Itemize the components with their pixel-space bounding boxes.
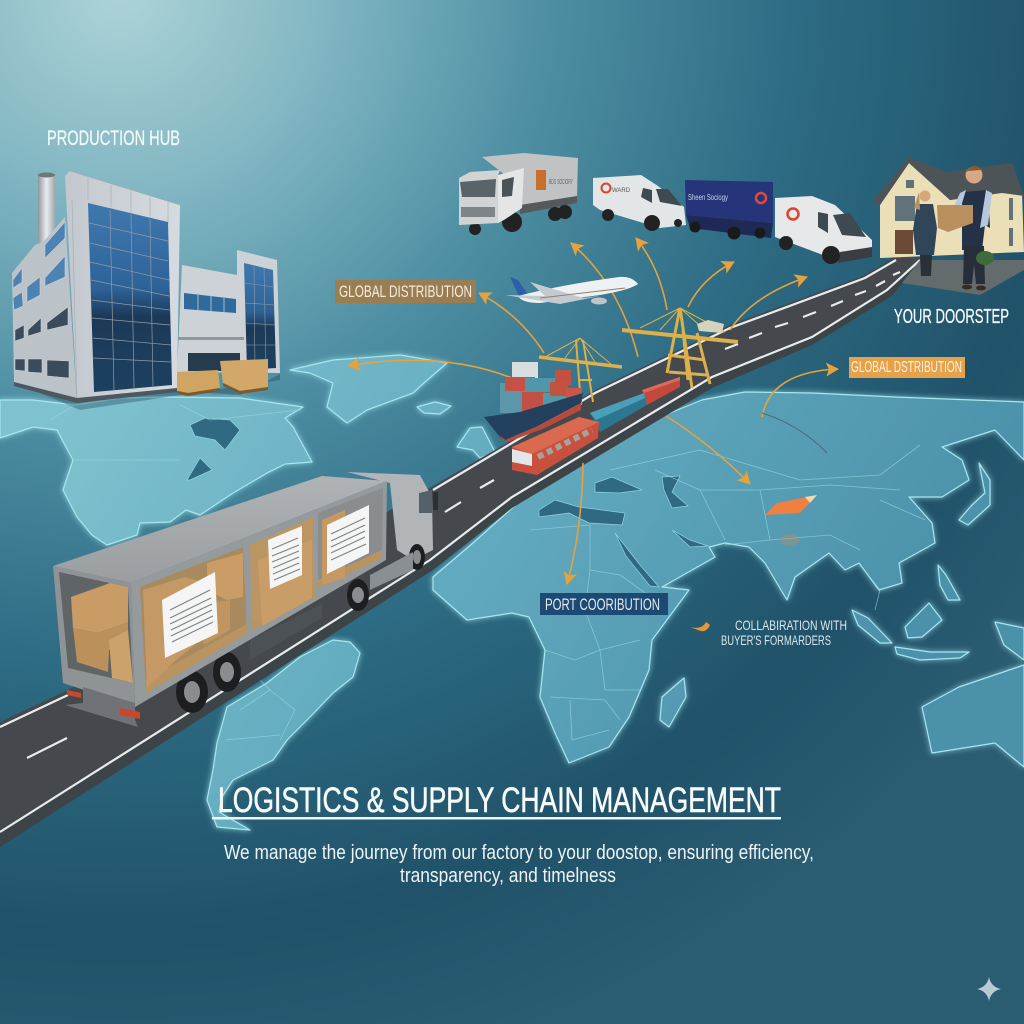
truck: rear boxes [71, 583, 133, 683]
blue truck: cargo box [685, 180, 773, 223]
arrow: down to port coordination [567, 463, 583, 584]
sea: hudson bay [190, 418, 240, 450]
van two [775, 196, 872, 264]
train: blue wagon [590, 393, 647, 432]
truck: side boxes [143, 510, 345, 687]
factory: window band [184, 293, 236, 313]
factory: right wing [177, 250, 280, 373]
map: iceland [417, 402, 451, 414]
map: eurasia and africa [433, 392, 1024, 763]
world map [0, 355, 1024, 830]
truck: grille [461, 207, 495, 217]
factory: glass curtain wall [88, 203, 172, 392]
sea: persian gulf [672, 530, 708, 547]
parcel [937, 205, 973, 232]
truck: wheels [469, 205, 572, 235]
road: surface [0, 258, 920, 832]
truck: compartment one [140, 547, 247, 693]
label: collaboration with buyer's forwarders [721, 617, 847, 648]
truck: document one [162, 572, 218, 658]
truck: document two [268, 526, 302, 589]
arrow: to greenland [348, 360, 512, 378]
ship: containers [500, 370, 582, 416]
van: bumper [838, 247, 872, 263]
label: global distribution right [849, 357, 965, 378]
factory: chimney [38, 172, 55, 247]
truck: tractor cab [347, 472, 438, 560]
shrubs [976, 251, 994, 265]
house and delivery scene [872, 157, 1024, 295]
van: logo text: WARD [612, 188, 631, 194]
ship: bridge [512, 362, 538, 380]
crane left [539, 338, 622, 405]
crane right [622, 308, 738, 388]
truck: side window [502, 177, 514, 197]
arrow: up to blue truck [688, 262, 734, 307]
arrow: to right global distribution label [762, 369, 838, 417]
van: body [775, 196, 872, 258]
map: japan [959, 463, 990, 525]
icon: sparkle watermark [977, 977, 1001, 1001]
label: port coordination [540, 593, 668, 615]
map: borneo [905, 603, 942, 638]
arrow: to global distribution label [479, 293, 544, 353]
factory: canopy and entrance [178, 337, 244, 371]
map: north america [0, 397, 312, 545]
blue truck: lettering: Sheen Sociogy [688, 193, 728, 202]
truck: trailer rear frame [53, 566, 135, 707]
crates [177, 359, 268, 396]
airplane: engine [591, 298, 607, 304]
arrow: faint gray route [762, 413, 827, 453]
arrow: up to second van [730, 277, 807, 330]
factory: left wing [12, 217, 77, 402]
map: new guinea [995, 622, 1024, 660]
house: roof [872, 157, 1024, 205]
map: country borders [50, 405, 925, 740]
truck: rear interior [59, 572, 133, 683]
crate: large [220, 359, 268, 394]
ship: red waterline [499, 403, 581, 442]
sea: mediterranean [539, 500, 625, 525]
map: australia [922, 665, 1024, 767]
delivery truck [459, 153, 578, 235]
factory: base line [14, 382, 177, 403]
map: british isles [457, 427, 495, 458]
truck: logo [536, 170, 546, 190]
factory [12, 171, 280, 410]
truck: cab front [459, 170, 500, 225]
sea: caspian [662, 476, 688, 508]
label: global distribution left: GLOBAL DISTRIBUTION [339, 282, 472, 301]
truck: rear wheels [176, 544, 425, 713]
truck: compartment three [318, 488, 383, 588]
semi trailer truck [53, 472, 438, 727]
delivery truck: BDS SOCIORY [549, 179, 573, 186]
airplane: fuselage [518, 277, 638, 303]
map: sumatra [852, 610, 892, 643]
airplane: wing [505, 282, 600, 304]
icon: faded marker [780, 534, 800, 546]
truck: tail lights [67, 690, 140, 719]
factory: ground shadow [14, 374, 280, 410]
truck: cab side [498, 168, 524, 223]
train: red wagon [642, 377, 680, 405]
sea: black sea [595, 477, 642, 493]
crane: legs [667, 308, 710, 388]
arrow: up to first van [636, 238, 667, 310]
sea: great lakes [187, 458, 212, 480]
train: windows [538, 430, 592, 457]
truck: document three [327, 505, 369, 574]
house: windows [895, 180, 1013, 254]
label: collaboration with buyer's forwarders: COLLABIRATION WITH [735, 617, 847, 633]
truck: trailer side frame [131, 481, 387, 707]
van: logo [788, 208, 798, 220]
van: body [593, 175, 686, 228]
person: customer [913, 190, 937, 276]
cargo ship [484, 362, 583, 442]
train: locomotive cab [512, 449, 532, 466]
subtitle: transparency, and timelness [400, 865, 616, 887]
crane: cables [545, 338, 612, 365]
crane: cables [640, 308, 725, 332]
truck: side underguard [250, 604, 322, 660]
blue truck: chassis [686, 215, 773, 238]
map: madagascar [660, 678, 686, 727]
arrow: into asia [666, 416, 750, 484]
blue truck: logo [756, 193, 766, 203]
airplane: cockpit stripe [540, 288, 625, 298]
airplane [505, 277, 638, 304]
label: port coordination: PORT COORIBUTION [545, 595, 660, 614]
person: delivery courier [955, 166, 992, 290]
label: production hub: PRODUCTION HUB [47, 127, 180, 150]
factory: left wing windows [13, 222, 69, 378]
subtitle: We manage the journey from our factory to your doostop, ensuring efficiency, [224, 842, 814, 864]
crane: boom [539, 357, 622, 367]
crate: small [177, 370, 220, 396]
truck: compartment two [250, 517, 315, 630]
truck: floor strips [146, 550, 382, 693]
truck: chassis and bumper [65, 687, 138, 727]
train: locomotive [512, 417, 599, 475]
truck: tractor step [370, 552, 413, 590]
factory: right wing glass [244, 263, 276, 370]
map: south america [207, 640, 360, 830]
factory: tower top lines [70, 171, 180, 402]
map: java [895, 647, 969, 660]
crane: boom [622, 330, 738, 342]
title: LOGISTICS & SUPPLY CHAIN MANAGEMENT [218, 781, 781, 820]
van: windows [641, 188, 682, 206]
truck: chassis [520, 196, 577, 214]
train [512, 377, 680, 475]
truck: trailer roof [53, 476, 387, 583]
label: collaboration with buyer's forwarders: BUYER'S FORMARDERS [721, 632, 831, 648]
icon: orange location pin [765, 495, 817, 515]
van: logo [602, 184, 610, 192]
icon: small orange mark [690, 622, 710, 631]
map: philippines [938, 565, 960, 600]
label: global distribution left [335, 280, 476, 303]
map: greenland [290, 355, 447, 423]
sea: red sea [615, 533, 659, 587]
road: lane lines [0, 260, 920, 832]
ship: hull [484, 393, 583, 441]
van one [593, 175, 686, 231]
road: side edge [0, 262, 921, 847]
road [0, 258, 921, 847]
blue truck [685, 180, 773, 240]
van: wheels [779, 236, 840, 264]
blue truck: wheels [690, 222, 766, 240]
crane: mast [576, 340, 593, 405]
label: global distribution right: GLOBAL DSTRIBUTION [851, 359, 962, 376]
airplane: tail [510, 277, 530, 298]
subtitle [224, 842, 814, 887]
factory: main tower [65, 171, 180, 402]
house: ground [902, 260, 1024, 295]
truck: windshield [460, 179, 496, 197]
house: walls [880, 163, 1024, 258]
van: wheels [602, 209, 682, 231]
van: windows [818, 212, 866, 237]
truck: cargo box [482, 153, 578, 206]
crane: suspended cargo [697, 320, 724, 333]
map: inland seas [187, 418, 708, 587]
arrow: up to delivery truck [571, 243, 638, 357]
